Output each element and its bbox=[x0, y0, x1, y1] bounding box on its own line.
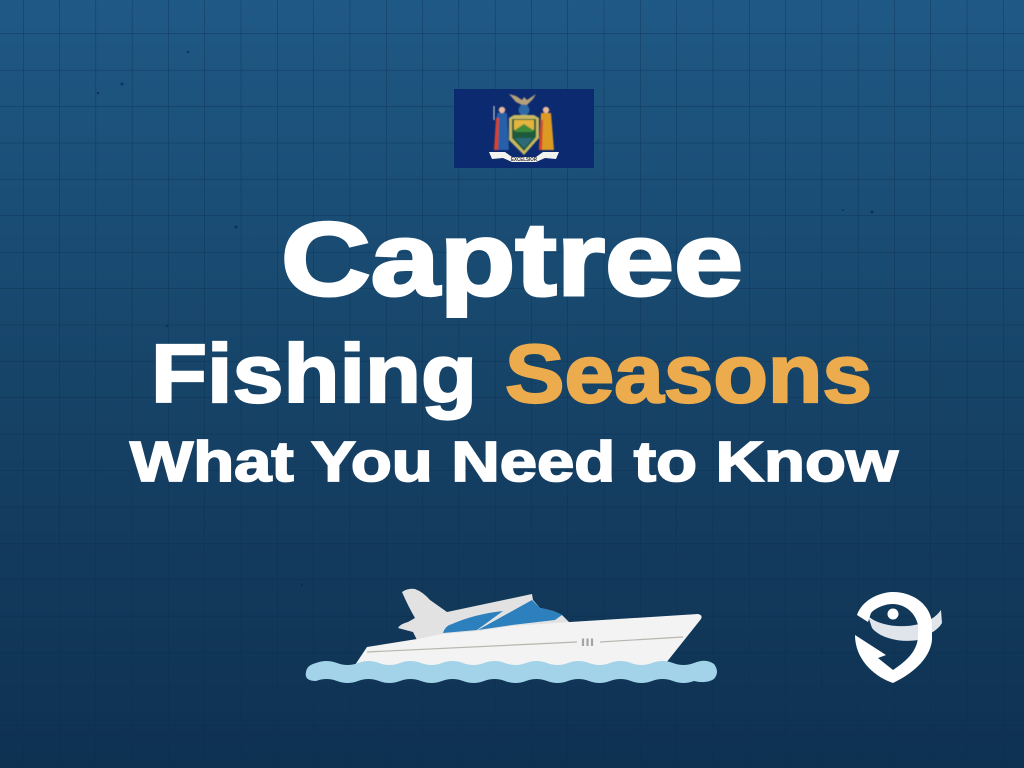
hook body bbox=[855, 592, 932, 683]
shield bbox=[509, 115, 539, 155]
icon: yacht bbox=[306, 589, 717, 683]
title bbox=[130, 202, 899, 494]
heading: Captree: Captree bbox=[281, 202, 743, 318]
globe bbox=[518, 104, 530, 116]
flag of New York bbox=[454, 89, 594, 168]
windows bbox=[478, 600, 562, 630]
heading: Fishing: Fishing bbox=[151, 327, 477, 420]
cabin and fin bbox=[398, 589, 570, 640]
water bbox=[306, 661, 717, 683]
heading: Seasons: Seasons bbox=[505, 327, 872, 420]
vents bbox=[583, 638, 592, 646]
logo: fish hook bbox=[855, 592, 942, 683]
eagle bbox=[509, 94, 536, 105]
eye bbox=[888, 608, 898, 620]
subtitle: What You Need to Know bbox=[130, 430, 899, 494]
right figure: Justice bbox=[539, 107, 554, 150]
hull bbox=[353, 614, 702, 668]
hull stripe bbox=[367, 637, 683, 652]
left figure: Liberty bbox=[494, 106, 509, 150]
motto ribbon: EXCELSIOR bbox=[511, 157, 537, 163]
tail band bbox=[868, 610, 942, 641]
